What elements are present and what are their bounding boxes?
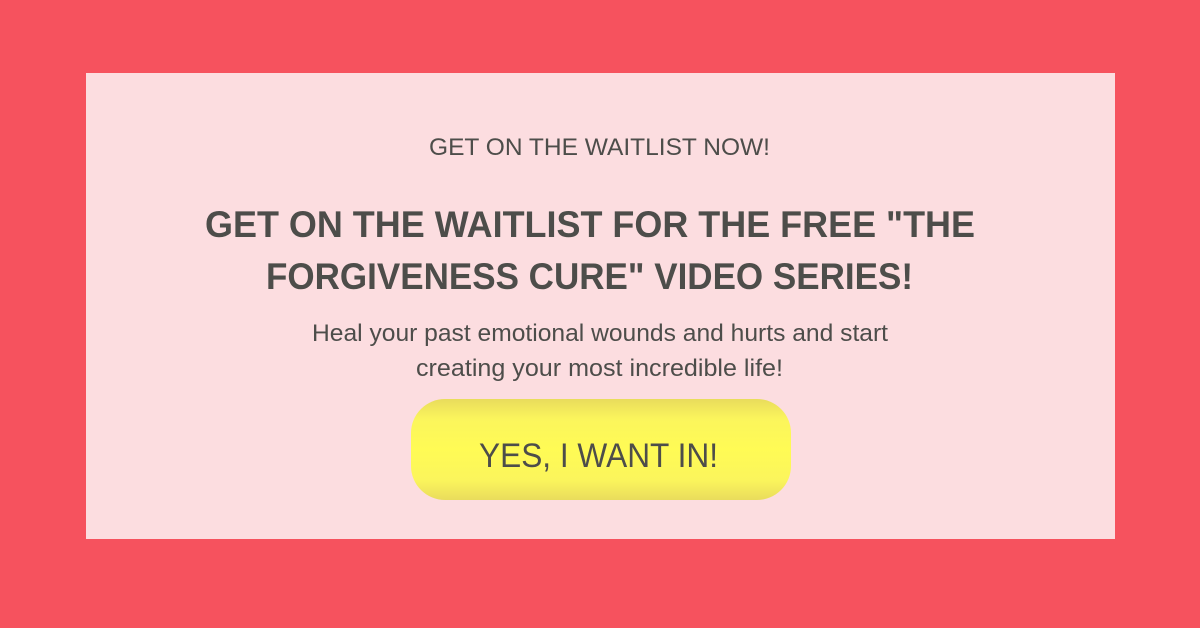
eyebrow text: GET ON THE WAITLIST NOW! [429,134,770,161]
button: yes, I want in [411,399,791,500]
heading [205,204,975,297]
subheading text [312,320,888,382]
subheading text: creating your most incredible life! [416,355,783,382]
heading: FORGIVENESS CURE" VIDEO SERIES! [266,256,913,297]
button label: YES, I WANT IN! [479,437,718,475]
panel: waitlist card [86,73,1115,539]
heading: GET ON THE WAITLIST FOR THE FREE "THE [205,204,975,245]
subheading text: Heal your past emotional wounds and hurts and start [312,320,888,347]
